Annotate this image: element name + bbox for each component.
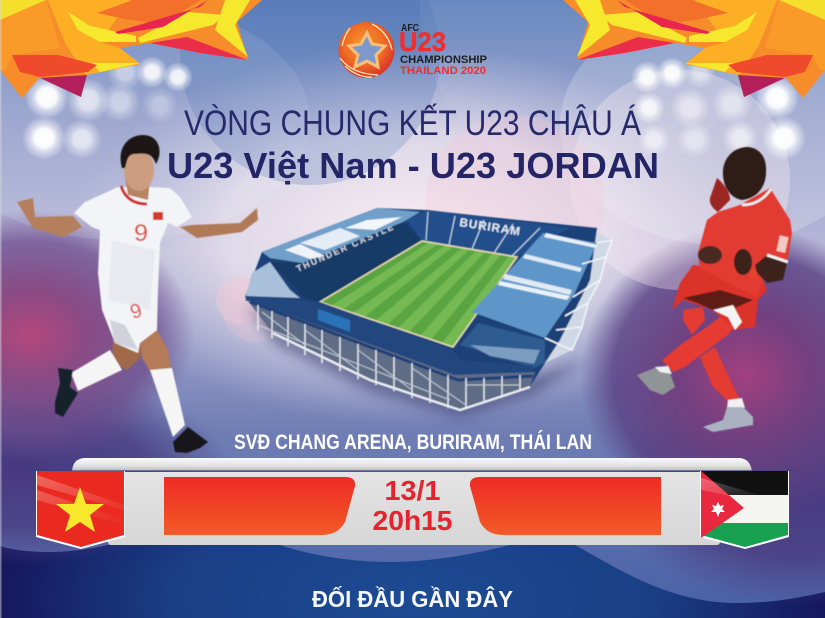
jersey [698,188,792,298]
front ankle [655,366,672,374]
match date: 13/1 [384,475,440,506]
left roof [262,208,420,263]
banner top strip [72,458,752,471]
jersey flag badge [153,212,163,220]
wristband [749,268,757,280]
head [723,147,766,200]
hair [121,135,160,168]
stadium illustration [245,208,612,418]
jersey number: 9 [134,220,148,247]
hanging thigh [683,307,705,335]
player: Jordan [637,147,792,432]
front leg [662,317,733,372]
left stand [270,222,422,302]
logo text: U23: U23 [399,27,446,57]
front thigh [140,330,171,371]
collar [121,186,147,204]
venue text: SVĐ CHANG ARENA, BURIRAM, THÁI LAN [234,431,592,454]
icon: yellow star [56,487,104,532]
left edge line [0,0,2,618]
shorts [672,265,767,330]
section heading: ĐỐI ĐẦU GẦN ĐÂY [312,585,513,612]
right roof [472,233,598,338]
back boot [55,368,78,417]
left arm [17,198,82,237]
far stand [407,210,570,257]
back sock [727,398,745,408]
back boot [703,407,753,432]
player: Vietnam number 9 [17,135,258,453]
stadium base [244,207,598,386]
background: deep blue base [18,545,806,618]
logo text: Championship: CHAMPIONSHIP [400,54,487,66]
pitch [320,241,517,347]
back thigh [112,340,142,370]
logo text: AFC: AFC [401,23,419,34]
logo: AFC U23 Championship [338,22,487,78]
stadium lights right [631,56,806,160]
front boot [637,367,675,395]
shorts number: 9 [127,300,145,324]
decorative star: top right [563,0,825,98]
left tower [246,262,300,298]
head [124,149,154,191]
fists [698,246,752,275]
icon: logo ball [338,22,394,78]
raised hand [710,178,730,212]
orange bar right [470,477,661,535]
orange bar left [164,477,355,535]
screen [318,309,350,332]
front sock [150,368,185,437]
front boot [173,427,208,453]
logo text: Thailand 2020: THAILAND 2020 [400,65,486,77]
stadium shadow [245,305,585,418]
jersey and shorts [74,187,192,353]
sleeve badge [776,235,789,253]
right arm [755,255,787,283]
banner panel [108,472,720,545]
title line 1: VÒNG CHUNG KẾT U23 CHÂU Á [184,103,642,143]
jersey collar [742,189,771,205]
stadium lights left [22,54,193,160]
title line 2: U23 Việt Nam - U23 JORDAN [167,145,659,186]
right truss structure [545,240,612,350]
match banner [30,458,795,545]
flag: Vietnam [36,471,125,549]
near stand [244,298,534,368]
match time: 20h15 [372,505,452,536]
back leg sock [71,350,122,391]
stadium name: BURIRAM: BURIRAM [459,215,522,239]
right truss backing [530,228,612,387]
neck [125,178,150,200]
icon: Jordan star [711,502,725,517]
far stand aisles [426,212,540,256]
thigh band [713,305,742,330]
flag: Jordan [700,471,789,549]
right arm [180,208,258,238]
shorts shadow [683,290,753,310]
lower facade [248,300,535,410]
stadium name: Thunder Castle: THUNDER CASTLE [295,222,395,274]
decorative star: top left [0,0,262,98]
near-right stand [460,323,545,368]
sleeve trim [767,255,788,262]
back shin [700,347,740,403]
banner shadow line [30,470,795,472]
